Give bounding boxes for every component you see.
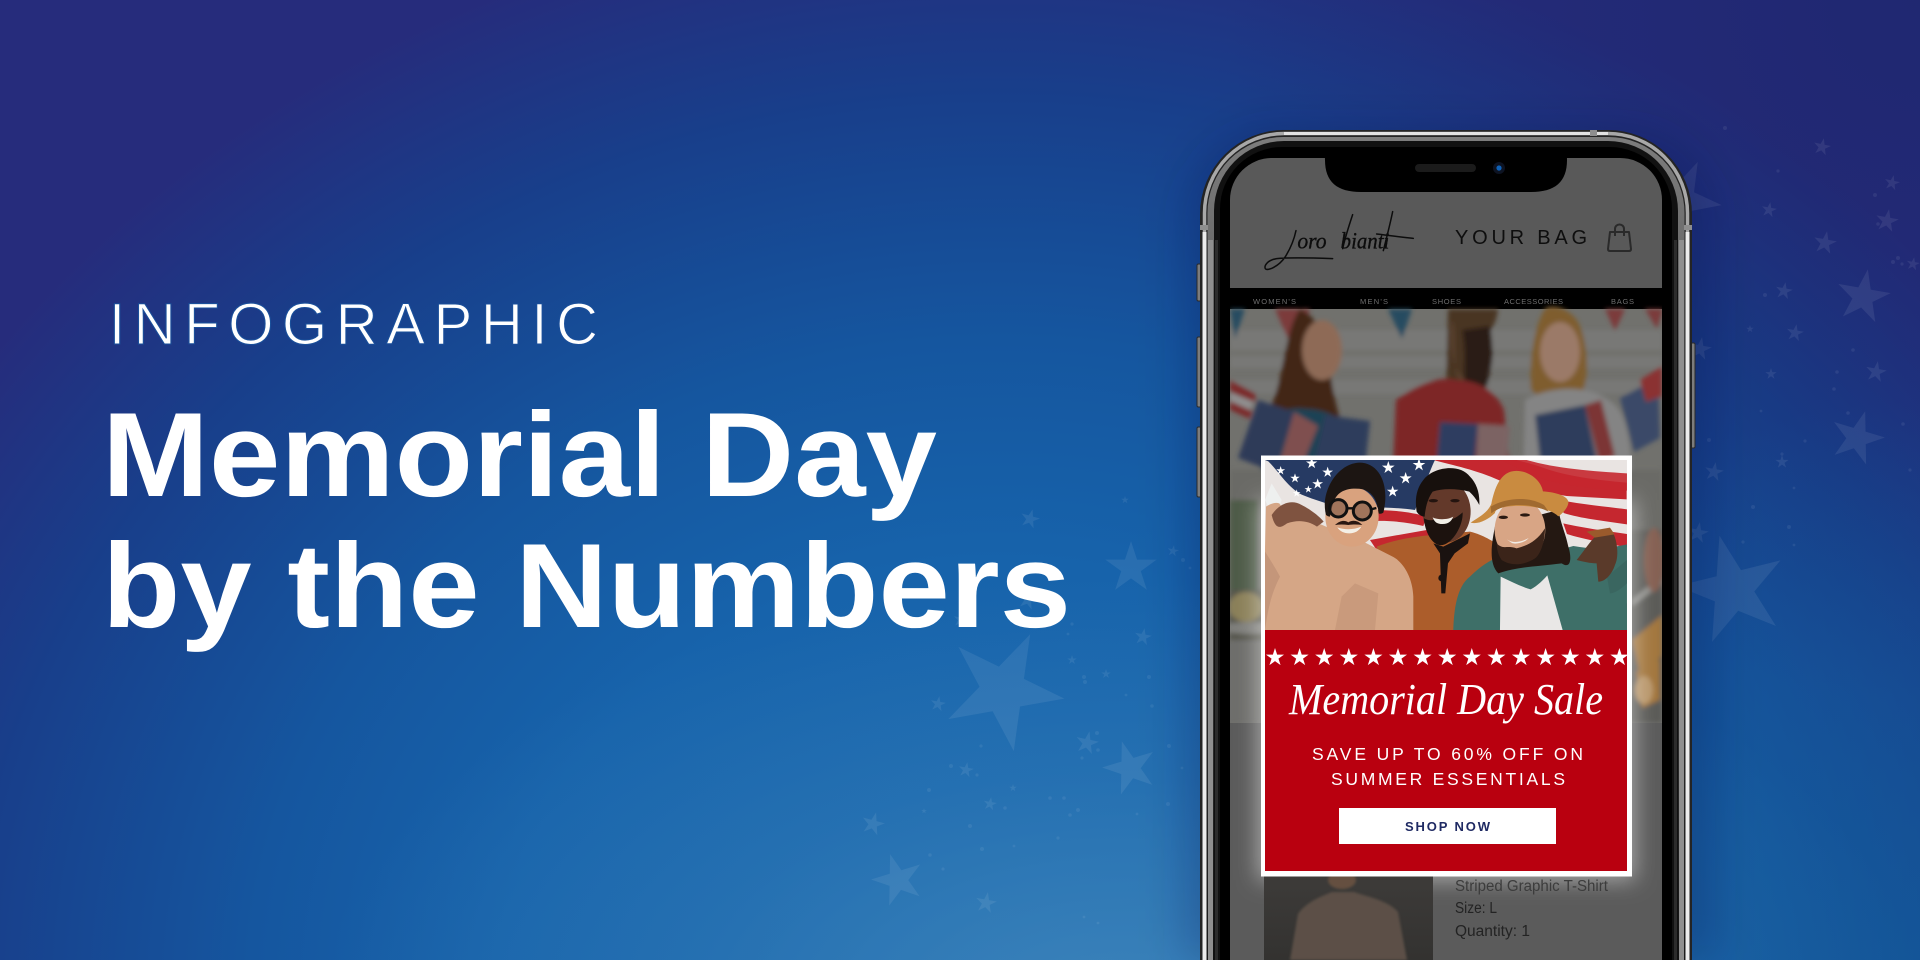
icon: shopping bag xyxy=(1608,224,1631,251)
background star pattern xyxy=(859,126,1920,924)
label: YOUR BAG: YOUR BAG xyxy=(1455,227,1587,249)
store header xyxy=(1230,158,1662,288)
shop now button xyxy=(1339,808,1556,844)
flag canton xyxy=(1265,460,1435,510)
nav bar xyxy=(1253,299,1634,304)
sale headline: Memorial Day Sale xyxy=(1288,675,1603,724)
nav bar: WOMEN'S xyxy=(1253,297,1296,306)
sale popup xyxy=(1261,456,1632,876)
camera xyxy=(1493,162,1505,174)
middle man xyxy=(1377,468,1498,630)
phone frame xyxy=(1200,130,1692,960)
sale offer: SAVE UP TO 60% OFF ON xyxy=(1312,744,1583,764)
phone screen xyxy=(1220,158,1664,960)
speaker xyxy=(1415,164,1476,172)
sale offer: SUMMER ESSENTIALS xyxy=(1331,769,1565,789)
shop now button: SHOP NOW xyxy=(1405,819,1491,834)
product details xyxy=(1455,878,1609,940)
label: INFOGRAPHIC: INFOGRAPHIC xyxy=(109,292,598,357)
title: Memorial Day xyxy=(102,388,937,522)
phone side buttons xyxy=(1197,264,1695,497)
product details: Striped Graphic T-Shirt xyxy=(1455,878,1609,895)
product photo xyxy=(1264,871,1433,960)
popup red panel xyxy=(1265,630,1628,871)
right man xyxy=(1453,471,1627,630)
nav bar: BAGS xyxy=(1611,297,1634,306)
blurred lifestyle photo xyxy=(1220,307,1664,723)
phone shadow xyxy=(1185,130,1715,960)
lower store panel xyxy=(1230,723,1662,960)
product details: Size: L xyxy=(1455,900,1497,917)
logo: joro bianti: bianti xyxy=(1341,228,1389,254)
popup glow xyxy=(1258,500,1635,880)
flag stripes xyxy=(1368,460,1627,613)
star row xyxy=(1266,648,1628,665)
logo: joro bianti xyxy=(1265,212,1413,269)
phone notch xyxy=(1318,150,1574,192)
nav bar: MEN'S xyxy=(1360,297,1388,306)
nav bar: ACCESSORIES xyxy=(1504,297,1563,306)
title: by the Numbers xyxy=(102,519,1071,653)
nav bar: SHOES xyxy=(1432,297,1461,306)
logo: joro bianti: oro xyxy=(1297,228,1327,254)
product details: Quantity: 1 xyxy=(1455,923,1530,940)
popup photo xyxy=(1265,457,1627,630)
left man xyxy=(1265,463,1413,630)
phone mockup xyxy=(1197,130,1695,960)
title xyxy=(102,388,1071,653)
sale offer xyxy=(1312,744,1583,789)
